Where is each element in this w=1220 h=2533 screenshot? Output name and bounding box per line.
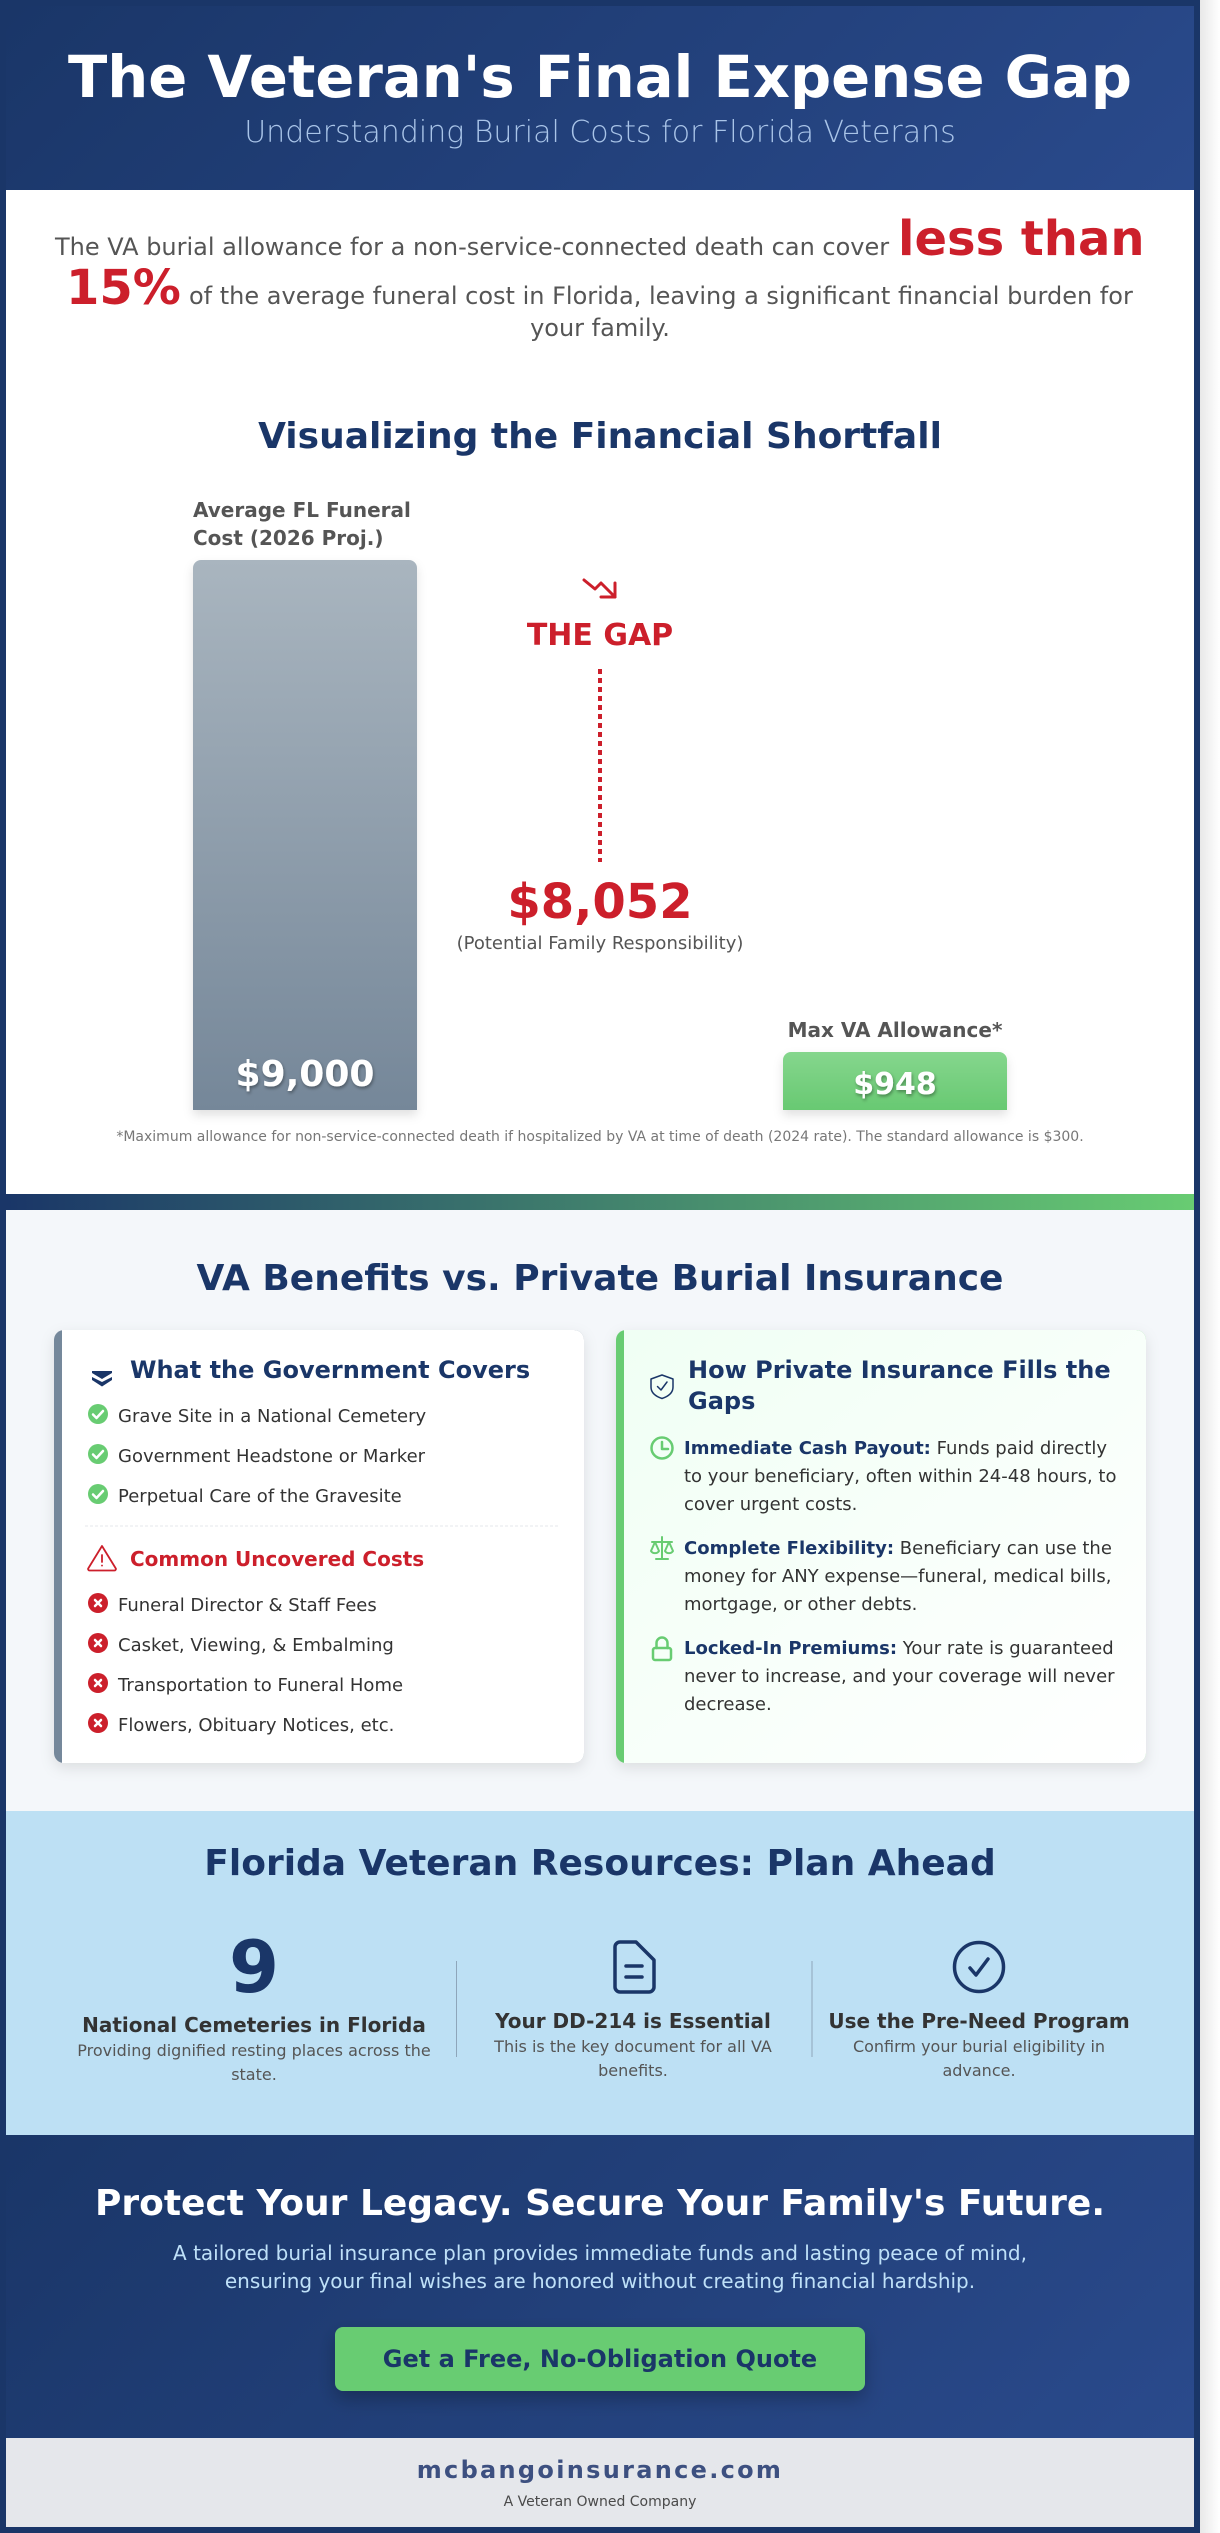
uncovered list (88, 1593, 403, 1736)
icon: warning (88, 1546, 116, 1571)
resource: pre-need program: advance. (942, 2061, 1016, 2080)
bar: average funeral cost (193, 498, 417, 1110)
heading: Florida Veteran Resources: Plan Ahead (204, 1843, 996, 1884)
section heading: shortfall: Visualizing the Financial Shortfall (258, 416, 942, 457)
stat: national cemeteries: 9 (229, 1925, 279, 2009)
heading: Protect Your Legacy. Secure Your Family's Future. (95, 2183, 1105, 2224)
stat: national cemeteries: state. (231, 2065, 277, 2084)
bar: average funeral cost: $9,000 (236, 1054, 374, 1095)
panel: private insurance card: Gaps (688, 1387, 755, 1415)
benefit: locked premiums: never to increase, and your coverage will never (684, 1666, 1115, 1687)
bar: average funeral cost: Average FL Funeral (193, 498, 411, 522)
bar: average funeral cost: Cost (2026 Proj.) (193, 526, 383, 550)
heading: VA Benefits vs. Private Burial Insurance (197, 1258, 1003, 1299)
text block: A tailored burial insurance plan provides immediate funds and lasting peace of mind, (173, 2241, 1027, 2265)
resource: pre-need program: Use the Pre-Need Program (828, 2009, 1130, 2033)
icon: scales (651, 1537, 673, 1559)
gap callout (457, 580, 743, 954)
panel: call to action (6, 2135, 1194, 2438)
benefit: cash payout: cover urgent costs. (684, 1494, 857, 1515)
benefit: flexibility (651, 1537, 1112, 1615)
bar: VA allowance: Max VA Allowance* (788, 1018, 1003, 1042)
icon: clock (652, 1438, 672, 1458)
intro statement: The VA burial allowance for a non-service-connected death can cover (54, 233, 889, 261)
covered list: Grave Site in a National Cemetery (118, 1406, 427, 1427)
uncovered list: Casket, Viewing, & Embalming (118, 1635, 394, 1656)
covered list: Perpetual Care of the Gravesite (118, 1486, 402, 1507)
resource: pre-need program: Confirm your burial eligibility in (853, 2037, 1105, 2056)
benefit: flexibility: money for ANY expense—funeral, medical bills, (684, 1566, 1111, 1587)
intro statement: of the average funeral cost in Florida, leaving a significant financial burden for (189, 282, 1133, 310)
header (6, 6, 1194, 190)
subtitle: Understanding Burial Costs for Florida Veterans (244, 115, 956, 150)
icon: check circle (954, 1942, 1004, 1992)
intro statement: less than (898, 211, 1145, 267)
benefit: flexibility: Complete Flexibility: Beneficiary can use the (684, 1538, 1112, 1559)
text block (173, 2241, 1027, 2293)
text block: ensuring your final wishes are honored without creating financial hardship. (225, 2269, 975, 2293)
icon: shield check (651, 1375, 673, 1398)
intro statement: 15% (66, 260, 181, 316)
stat: national cemeteries: National Cemeteries in Florida (82, 2013, 426, 2037)
button: Get a Free, No-Obligation Quote (383, 2345, 817, 2373)
intro statement: your family. (530, 314, 670, 342)
footnote: *Maximum allowance for non-service-connected death if hospitalized by VA at time of death (2024 rate). The standard allowance is $300. (116, 1129, 1084, 1145)
footer: A Veteran Owned Company (504, 2494, 696, 2510)
benefit: locked premiums: decrease. (684, 1694, 772, 1715)
gap callout: $8,052 (507, 874, 693, 930)
button (335, 2327, 865, 2391)
resource: pre-need program (828, 1942, 1130, 2080)
icon: document (615, 1942, 654, 1992)
icon: chevrons (92, 1371, 112, 1386)
stat: national cemeteries: Providing dignified resting places across the (77, 2041, 431, 2060)
bar: VA allowance: $948 (853, 1067, 937, 1102)
bar chart: funeral cost vs allowance (193, 498, 1007, 1110)
benefit: cash payout: to your beneficiary, often within 24-48 hours, to (684, 1466, 1116, 1487)
footer: mcbangoinsurance.com (417, 2456, 783, 2484)
intro statement (54, 211, 1145, 342)
resource: DD-214: Your DD-214 is Essential (494, 2009, 771, 2033)
panel: government coverage card (54, 1330, 584, 1763)
resource: DD-214: benefits. (598, 2061, 668, 2080)
panel: government coverage card: What the Government Covers (130, 1356, 530, 1384)
uncovered list: Transportation to Funeral Home (117, 1675, 403, 1696)
panel: private insurance card: How Private Insurance Fills the (688, 1356, 1111, 1384)
resource: DD-214 (493, 1942, 772, 2080)
icon: trending down arrow (584, 580, 615, 597)
title: The Veteran's Final Expense Gap (68, 44, 1132, 111)
gap callout: THE GAP (527, 618, 673, 653)
panel: government coverage card: Common Uncovered Costs (130, 1547, 424, 1571)
panel: private insurance card (616, 1330, 1146, 1763)
stat: national cemeteries (77, 1925, 431, 2084)
resource: DD-214: This is the key document for all VA (493, 2037, 772, 2056)
benefit: locked premiums: Locked-In Premiums: Your rate is guaranteed (684, 1638, 1114, 1659)
benefit: cash payout (652, 1438, 1116, 1515)
bar: VA allowance (783, 1018, 1007, 1110)
uncovered list: Funeral Director & Staff Fees (118, 1595, 377, 1616)
panel: VA benefits vs private insurance (6, 1210, 1194, 1811)
benefit: locked premiums (653, 1638, 1115, 1715)
benefit: flexibility: mortgage, or other debts. (684, 1594, 917, 1615)
benefit: cash payout: Immediate Cash Payout: Funds paid directly (684, 1438, 1107, 1459)
footer (6, 2438, 1194, 2527)
uncovered list: Flowers, Obituary Notices, etc. (118, 1715, 394, 1736)
covered list (88, 1404, 427, 1507)
icon: lock (653, 1638, 671, 1660)
covered list: Government Headstone or Marker (118, 1446, 426, 1467)
gap callout: (Potential Family Responsibility) (457, 933, 743, 954)
panel: Florida resources (6, 1811, 1194, 2135)
